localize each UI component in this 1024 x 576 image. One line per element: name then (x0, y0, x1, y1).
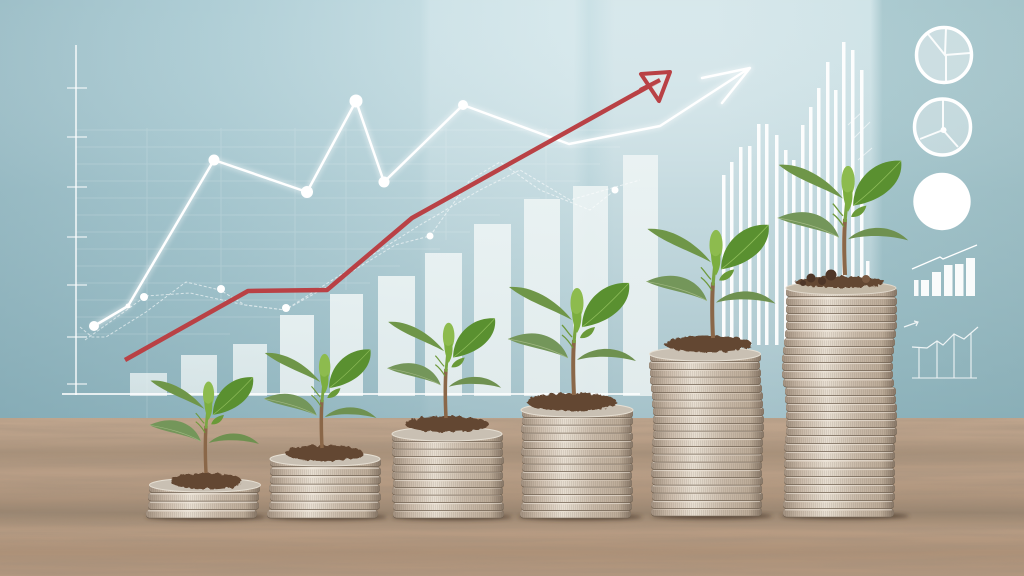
secondary dotted trend lines (80, 162, 640, 340)
soil 4 (527, 393, 617, 411)
icon: mini bar chart with trend line (912, 245, 977, 296)
icon: pie chart 2 (914, 99, 970, 155)
chart axes (62, 45, 640, 395)
soil 3 (405, 416, 489, 432)
coin stack 2 (267, 452, 381, 518)
background: wooden table (0, 418, 1024, 576)
right side thin bar chart (722, 42, 872, 345)
soil 6 (795, 270, 885, 288)
coin stack shadows (146, 513, 909, 520)
plant 6 (778, 161, 908, 275)
plant 1 (150, 377, 259, 473)
soil 1 (170, 473, 242, 489)
coin stack 6 (782, 282, 897, 518)
coin stack 3 (392, 427, 504, 518)
bar chart: translucent rising bars (130, 155, 658, 396)
plant 3 (387, 318, 501, 418)
icon: mini line chart (904, 321, 978, 378)
background: wall (0, 0, 1024, 420)
plant 5 (646, 225, 776, 338)
chart data dots (140, 186, 618, 312)
coin stack 4 (520, 403, 633, 518)
plant 2 (264, 349, 377, 448)
icon: pie chart 1 (916, 28, 972, 82)
white line chart with arrow (89, 68, 750, 331)
red trend arrow (125, 72, 670, 360)
icon: solid circle (913, 173, 971, 230)
coin stack 1 (146, 478, 260, 518)
soil 2 (285, 445, 363, 461)
plant 4 (508, 283, 636, 395)
faint chart grid (76, 128, 620, 418)
soil 5 (664, 336, 752, 352)
coin stack 5 (649, 347, 764, 516)
